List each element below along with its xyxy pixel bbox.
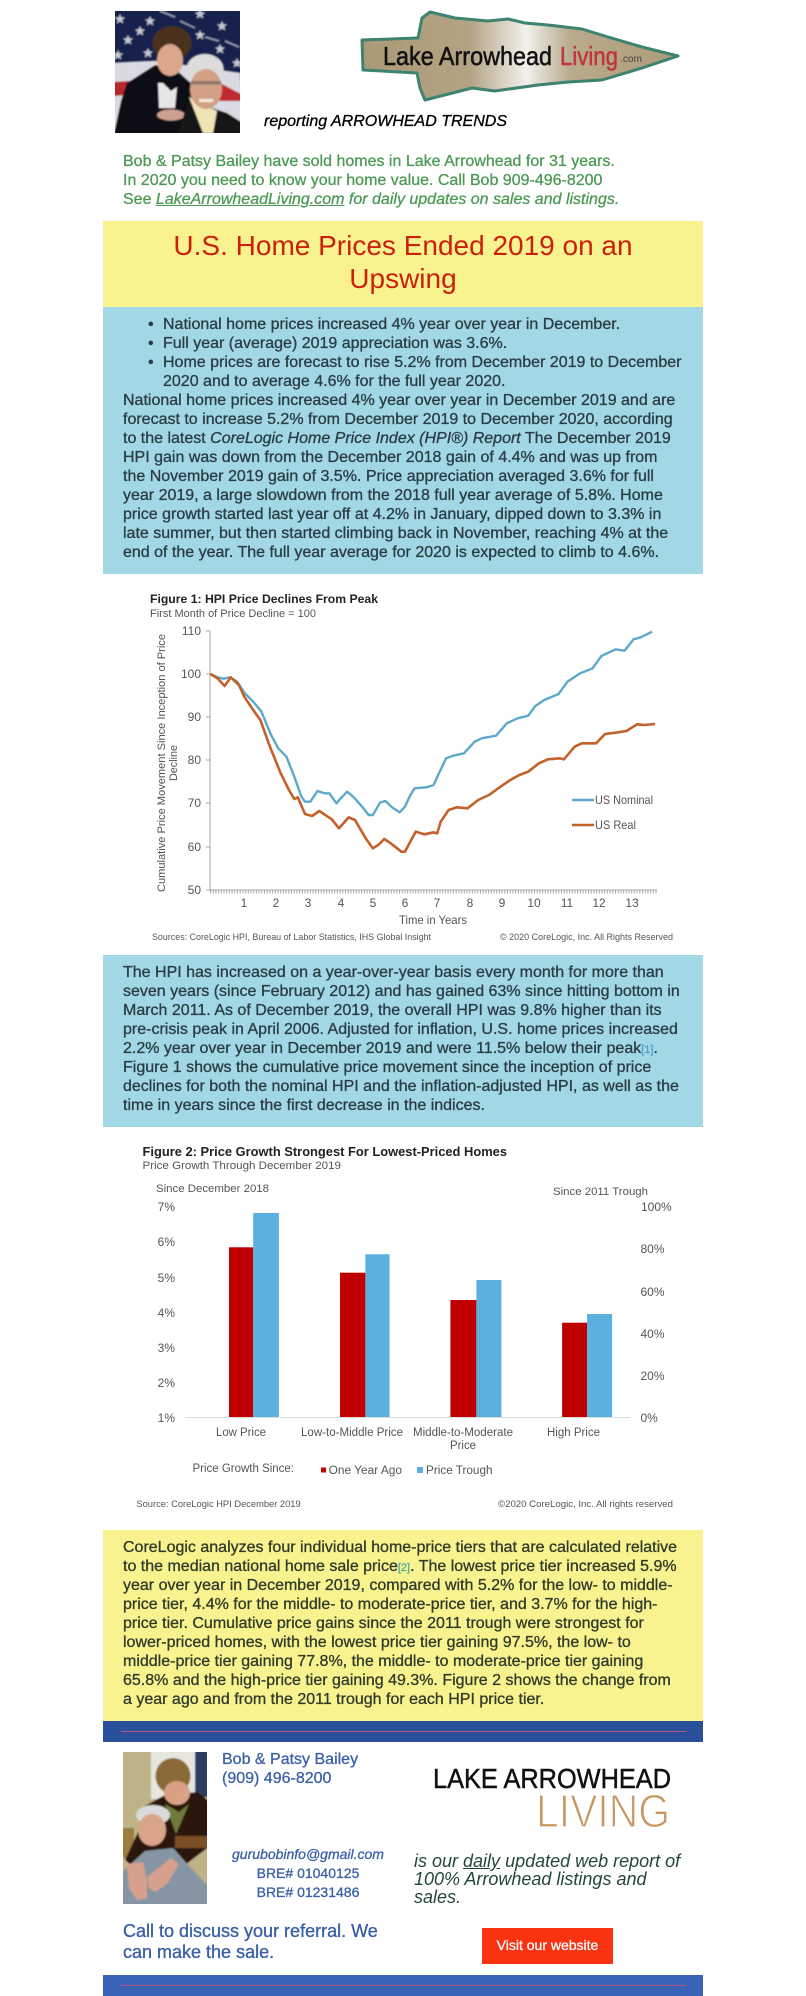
intro text in green: See LakeArrowheadLiving.com for daily updates on sales and listings. <box>123 191 619 208</box>
contact email and license numbers: gurubobinfo@gmail.com <box>232 1846 384 1862</box>
x axis labels: 2 <box>273 896 280 910</box>
x axis labels: 8 <box>467 896 474 910</box>
legend <box>192 1463 492 1477</box>
panel: summary with bullets <box>103 307 703 574</box>
x axis labels: 5 <box>370 896 377 910</box>
legend: US Nominal <box>595 793 653 807</box>
category labels: High Price <box>547 1427 600 1439</box>
source notes: Sources: CoreLogic HPI, Bureau of Labor Statistics, IHS Global Insight <box>152 932 431 943</box>
x axis labels: 9 <box>499 896 506 910</box>
intro text in green <box>123 153 619 208</box>
logo: Lake Arrowhead Living wordmark <box>433 1763 671 1835</box>
right axis labels: 0% <box>640 1411 658 1425</box>
axis captions: Since 2011 Trough <box>553 1186 648 1198</box>
logo: Lake Arrowhead Living arrowhead: Living <box>560 41 618 71</box>
y axis labels: 70 <box>188 796 201 810</box>
left axis labels: 4% <box>158 1306 175 1320</box>
paragraph: CoreLogic price tiers: middle-price tier gaining 77.8%, the middle- to moderate-price tier gaining <box>123 1653 643 1670</box>
x axis labels: 1 <box>241 896 248 910</box>
heading: article title <box>173 230 633 294</box>
category labels: Middle-to-Moderate <box>413 1427 513 1439</box>
source notes: ©2020 CoreLogic, Inc. All rights reserved <box>498 1499 673 1510</box>
right axis labels: 100% <box>641 1200 672 1214</box>
paragraph: national home prices: forecast to increase 5.2% from December 2019 to December 2020, according <box>123 411 673 428</box>
paragraph: CoreLogic price tiers: CoreLogic analyzes four individual home-price tiers that are calculated relative <box>123 1539 677 1556</box>
panel: title banner <box>103 221 703 307</box>
paragraph: national home prices: price growth started last year off at 4.2% in January, dipped down to 3.3% in <box>123 506 661 523</box>
y axis labels: 50 <box>188 883 201 897</box>
source notes <box>136 1499 673 1510</box>
legend: Price Trough <box>426 1465 492 1477</box>
legend: Price Growth Since: <box>192 1463 294 1475</box>
category labels: Low-to-Middle Price <box>301 1427 403 1439</box>
source notes <box>152 932 673 943</box>
paragraph: CoreLogic price tiers <box>122 1539 677 1708</box>
y axis labels: 60 <box>188 840 201 854</box>
bars: Low Price <box>229 1213 279 1417</box>
paragraph: HPI year-over-year: Figure 1 shows the cumulative price movement since the inception of price <box>123 1059 651 1076</box>
bars: Middle-to-Moderate Price <box>450 1280 501 1417</box>
x axis labels: 11 <box>561 896 574 910</box>
legend <box>572 793 653 832</box>
left axis labels: 6% <box>158 1235 175 1249</box>
paragraph: HPI year-over-year: March 2011. As of December 2019, the overall HPI was 9.8% higher than its <box>123 1002 662 1019</box>
paragraph: HPI year-over-year: time in years since the first decrease in the indices. <box>123 1097 485 1114</box>
y axis labels: 100 <box>181 667 201 681</box>
chart title: First Month of Price Decline = 100 <box>150 608 316 620</box>
bullet list: key takeaways: Full year (average) 2019 appreciation was 3.6%. <box>163 335 507 352</box>
paragraph: CoreLogic price tiers: a year ago and from the 2011 trough for each HPI price tier. <box>123 1691 544 1708</box>
source notes: © 2020 CoreLogic, Inc. All Rights Reserved <box>500 932 673 943</box>
source notes: Source: CoreLogic HPI December 2019 <box>136 1499 301 1510</box>
paragraph: HPI year-over-year: 2.2% year over year in December 2019 and were 11.5% below their peak[1]. <box>123 1040 658 1057</box>
x axis labels <box>241 896 639 927</box>
intro text in green: Bob & Patsy Bailey have sold homes in Lake Arrowhead for 31 years. <box>123 153 615 170</box>
left axis labels: 3% <box>158 1341 175 1355</box>
line: US Nominal <box>210 632 652 815</box>
x axis labels: Time in Years <box>399 913 467 927</box>
right axis labels: 60% <box>640 1285 665 1299</box>
x axis labels: 13 <box>625 896 639 910</box>
left axis labels: 1% <box>158 1411 175 1425</box>
contact name and phone: Bob & Patsy Bailey <box>222 1751 358 1768</box>
divider band: bottom of footer <box>103 1975 703 1996</box>
x axis labels: 4 <box>338 896 345 910</box>
bullet list: key takeaways: National home prices increased 4% year over year in December. <box>163 316 620 333</box>
paragraph: national home prices: year 2019, a large slowdown from the 2018 full year average of 5.8%. Home <box>123 487 663 504</box>
paragraph: CoreLogic price tiers: year over year in December 2019, compared with 5.2% for the low- to middle- <box>123 1577 673 1594</box>
y axis labels: 90 <box>188 710 201 724</box>
paragraph: HPI year-over-year <box>123 964 680 1114</box>
paragraph: CoreLogic price tiers: price tier. Cumulative price gains since the 2011 trough were strongest for <box>123 1615 644 1632</box>
paragraph: CoreLogic price tiers: to the median national home sale price[2]. The lowest price tier increased 5.9% <box>123 1558 677 1575</box>
bullet list: key takeaways: 2020 and to average 4.6% for the full year 2020. <box>163 373 505 390</box>
bars: High Price <box>562 1314 612 1417</box>
panel: HPI paragraph <box>103 955 703 1127</box>
description of web report: 100% Arrowhead listings and <box>414 1869 646 1889</box>
panel: summary with bullets: • <box>148 316 154 333</box>
bullet list: key takeaways: Home prices are forecast to rise 5.2% from December 2019 to December <box>163 354 681 371</box>
heading: article title: Upswing <box>349 263 457 294</box>
category labels: Price <box>450 1440 476 1452</box>
heading: article title: U.S. Home Prices Ended 2019 on an <box>173 230 633 261</box>
logo: Lake Arrowhead Living arrowhead: .com <box>620 53 642 65</box>
tagline: reporting Arrowhead trends: reporting ARROWHEAD TRENDS <box>264 113 507 130</box>
axis captions <box>156 1183 648 1198</box>
paragraph: CoreLogic price tiers: price tier, 4.4% for the middle- to moderate-price tier, and 3.7% for the high- <box>123 1596 658 1613</box>
chart title <box>142 1145 507 1172</box>
y axis title: Cumulative Price Movement Since Inception of Price <box>156 634 168 892</box>
contact email and license numbers: BRE# 01040125 <box>257 1865 359 1881</box>
photo: Bob and Patsy Bailey with flag <box>115 11 240 133</box>
y axis title <box>156 634 180 892</box>
left axis labels <box>158 1200 175 1425</box>
left axis labels: 7% <box>158 1200 175 1214</box>
legend: One Year Ago <box>329 1465 402 1477</box>
description of web report <box>414 1851 682 1907</box>
call to action text: Call to discuss your referral. We <box>123 1921 378 1941</box>
description of web report: is our daily updated web report of <box>414 1851 680 1871</box>
logo: Lake Arrowhead Living arrowhead: Lake Arrowhead <box>383 41 552 71</box>
call to action text <box>123 1921 378 1962</box>
right axis labels <box>640 1200 672 1425</box>
chart: Figure 2 price growth by tier bar chart <box>136 1145 673 1510</box>
panel: summary with bullets: • <box>148 354 154 371</box>
paragraph: HPI year-over-year: pre-crisis peak in April 2006. Adjusted for inflation, U.S. home prices increased <box>123 1021 678 1038</box>
contact name and phone: (909) 496-8200 <box>222 1770 331 1787</box>
paragraph: national home prices: National home prices increased 4% year over year in December 2019 and are <box>123 392 675 409</box>
contact name and phone <box>222 1751 358 1787</box>
category labels: Low Price <box>216 1427 266 1439</box>
right axis labels: 20% <box>640 1369 665 1383</box>
logo: Lake Arrowhead Living arrowhead <box>360 10 680 102</box>
y axis labels: 110 <box>182 624 201 638</box>
right axis labels: 40% <box>640 1327 665 1341</box>
photo: Bob and Patsy Bailey portrait <box>123 1752 207 1904</box>
left axis labels: 2% <box>158 1376 175 1390</box>
line: US Real <box>210 674 655 852</box>
category labels <box>216 1427 600 1452</box>
button: visit our website: Visit our website <box>497 1937 598 1953</box>
divider band: top of footer <box>103 1721 703 1742</box>
x axis labels: 7 <box>434 896 441 910</box>
chart title: Price Growth Through December 2019 <box>142 1160 341 1172</box>
bars: Low-to-Middle Price <box>340 1254 390 1417</box>
contact email and license numbers <box>232 1846 384 1900</box>
y axis title: Decline <box>168 745 180 781</box>
paragraph: national home prices: late summer, but then started climbing back in November, reaching 4% at the <box>123 525 668 542</box>
axis captions: Since December 2018 <box>156 1183 269 1195</box>
y axis labels: 80 <box>188 753 201 767</box>
panel: price tiers paragraph <box>103 1530 703 1721</box>
chart title: Figure 2: Price Growth Strongest For Lowest-Priced Homes <box>142 1145 507 1159</box>
chart: Figure 1 HPI price declines line chart <box>150 592 673 943</box>
paragraph: national home prices <box>122 392 675 561</box>
intro text in green: In 2020 you need to know your home value. Call Bob 909-496-8200 <box>123 172 602 189</box>
x axis labels: 6 <box>402 896 409 910</box>
x axis labels: 12 <box>592 896 606 910</box>
call to action text: can make the sale. <box>123 1942 274 1962</box>
paragraph: national home prices: end of the year. The full year average for 2020 is expected to climb to 4.6%. <box>123 544 659 561</box>
paragraph: CoreLogic price tiers: lower-priced homes, with the lowest price tier gaining 97.5%, the low- to <box>123 1634 631 1651</box>
paragraph: HPI year-over-year: seven years (since February 2012) and has gained 63% since hitting bottom in <box>123 983 680 1000</box>
button: visit our website <box>482 1928 613 1964</box>
x axis labels: 3 <box>305 896 312 910</box>
x axis labels: 10 <box>527 896 541 910</box>
paragraph: national home prices: HPI gain was down from the December 2018 gain of 4.4% and was up from <box>123 449 658 466</box>
chart title <box>150 592 378 620</box>
paragraph: HPI year-over-year: The HPI has increased on a year-over-year basis every month for more than <box>123 964 664 981</box>
y axis labels <box>181 624 201 897</box>
bullet list: key takeaways <box>148 316 682 390</box>
legend: US Real <box>595 818 636 832</box>
chart title: Figure 1: HPI Price Declines From Peak <box>150 592 378 606</box>
right axis labels: 80% <box>640 1242 665 1256</box>
paragraph: HPI year-over-year: declines for both the nominal HPI and the inflation-adjusted HPI, as well as the <box>123 1078 679 1095</box>
description of web report: sales. <box>414 1887 461 1907</box>
panel: summary with bullets: • <box>148 335 154 352</box>
contact email and license numbers: BRE# 01231486 <box>257 1884 359 1900</box>
paragraph: CoreLogic price tiers: 65.8% and the high-price tier gaining 49.3%. Figure 2 shows the change from <box>123 1672 671 1689</box>
axes <box>206 631 657 892</box>
paragraph: national home prices: to the latest CoreLogic Home Price Index (HPI®) Report The December 2019 <box>123 430 671 447</box>
left axis labels: 5% <box>158 1271 175 1285</box>
paragraph: national home prices: the November 2019 gain of 3.5%. Price appreciation averaged 3.6% for full <box>123 468 654 485</box>
